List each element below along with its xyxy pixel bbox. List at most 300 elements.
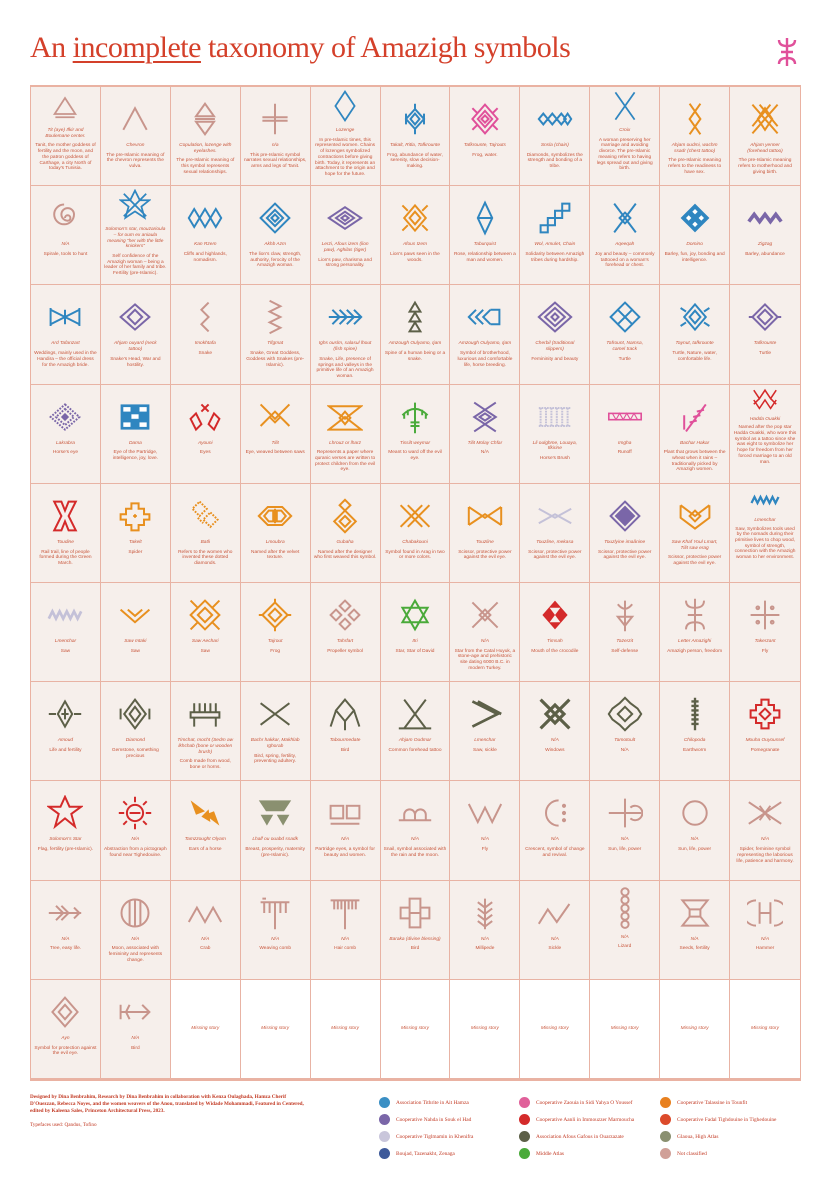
cell: Timsah: Mouth of the crocodile <box>531 649 578 654</box>
cell: Itri <box>381 583 450 682</box>
cell: Copulation <box>171 87 241 186</box>
cell: Chevron: The pre-Islamic meaning of the chevron represents the vulva. <box>106 153 164 169</box>
cell: Imgha <box>590 385 660 484</box>
cell: Lmoubra <box>241 484 311 583</box>
cell: Tifgmat: Tifgmat <box>267 341 283 346</box>
cell: Tree: Tree, easy life. <box>50 946 81 951</box>
cell: Lli oulghme: Lli oulghme, Louaya, <box>533 441 577 446</box>
cell: n/a cross: This pre-Islamic symbol narrates sexual relationships, arms and legs of Tanit. <box>244 153 306 169</box>
cell: Sun circle: Sun, life, power <box>678 847 711 852</box>
cell: Afous Izem <box>381 186 450 285</box>
cell: Lerzi: Lerzi, Afous izem (lion <box>322 242 369 247</box>
cell: Domino <box>660 186 730 285</box>
cell: Lmenchar saw: Lmenchar <box>55 639 76 644</box>
cell: Saw Aechari: Saw Aechari <box>192 639 219 644</box>
cell: Saw mtaki: Saw mtaki <box>124 639 146 644</box>
cell: Ighs ouslm <box>311 285 381 385</box>
cell: Taburquist: Taburquist <box>474 242 496 247</box>
credits text: Designed by Dina Benbrahim, Research by Dina Benbrahim in collaboration with Kenza Oulaghada, Hamza Cherif D'Ouezzan, Rebecca Noyes, and the women weavers of the Anou, translated by Widade Mohammadi, Featured in Centered, edited by Kaleena Sales, Princeton Architectural Press, 2023. <box>30 1094 304 1114</box>
cell: Bird: Bird <box>131 1046 140 1050</box>
cell: Catal Huyuk star <box>450 583 520 682</box>
cell: Sickle: N/A <box>551 937 559 942</box>
cell: missing 9: Missing story <box>751 1026 779 1031</box>
cell: Tilit Molay Chfar: N/A <box>481 450 489 455</box>
cell: Lakrabra: Lakrabra <box>56 441 75 446</box>
cell: Lizard: Lizard <box>618 944 631 949</box>
cell: Bird <box>101 980 171 1079</box>
cell: Timchat: lkhchab (bone or wooden <box>178 744 232 749</box>
cell: Tighedouine sun: N/A <box>131 837 139 842</box>
cell: missing 1: Missing story <box>191 1026 219 1031</box>
cell: Zigzag: Barley, abundance <box>745 252 785 257</box>
cell: Lhalf <box>241 781 311 881</box>
cell: Sun circle <box>660 781 730 881</box>
cell: Dama: Dama <box>129 441 142 446</box>
cell: Weaving comb <box>241 881 311 980</box>
cell: Gubaha <box>311 484 381 583</box>
cell: Sickle <box>520 881 590 980</box>
cell: Saw Aechari <box>171 583 241 682</box>
cell: Tafkrounte turtle: Turtle <box>759 351 771 356</box>
cell: Letter Amazighi <box>660 583 730 682</box>
cell: Solomon's Star red: Solomon's Star <box>49 837 82 842</box>
cell: missing 5: Missing story <box>471 1026 499 1031</box>
cell: Amoud <box>31 682 101 781</box>
legend item: Cooperative Zaouia in Sidi Yahya O Youssef <box>536 1100 632 1106</box>
cell: Bachar Hakar <box>660 385 730 484</box>
cell: Baraka <box>381 881 450 980</box>
legend item: Glaoua, High Atlas <box>677 1134 718 1140</box>
cell: Ahjam yenner: (forehead tattoo) <box>747 149 783 154</box>
cell: Cherbil: Cherbil (traditional <box>535 341 574 346</box>
cell: Takelt: Takelt <box>129 540 142 545</box>
cell: Itri: Star, Star of David <box>396 649 434 654</box>
cell: Hadda Ouakki: Hadda Ouakki <box>750 417 780 422</box>
cell: Spirale <box>31 186 101 285</box>
cell: Lmenchar sickle: Lmenchar <box>474 738 496 743</box>
cell: Lozenge: Lozenge <box>336 128 354 133</box>
cell: Lerzi <box>311 186 381 285</box>
cell: Copulation: Copulation, lozenge with eyelashes. <box>179 143 231 154</box>
cell: Moon <box>101 881 171 980</box>
cell: Tafkrounte turtle: Tafkrounte <box>754 341 776 346</box>
cell: Windows <box>520 682 590 781</box>
cell: Snsla: Snsla (chain) <box>541 143 569 148</box>
cell: Hammer <box>730 881 800 980</box>
cell: Afous Izem: Afous Izem <box>403 242 427 247</box>
cell: Tighedouine sun: Abstraction from a pictograph found near Tighedouine. <box>104 847 167 858</box>
cell: Takalt: Takalt, Ritla, Tafkrounte <box>390 143 440 148</box>
cell: Taburquist: Rose, relationship between a man and women. <box>454 252 516 263</box>
cell: Tit <box>31 87 101 186</box>
cell: Baraka: Bird <box>411 946 419 951</box>
cell: Lizard <box>590 881 660 980</box>
cell: Lmenchar saw <box>31 583 101 682</box>
cell: Tilit <box>241 385 311 484</box>
cell: Moon: Moon, associated with femininity and represents change. <box>109 946 162 963</box>
cell: missing 3: Missing story <box>331 1026 359 1031</box>
cell: Wol: Wol, Amulet, Chain <box>534 242 575 247</box>
cell: Tahrfart <box>311 583 381 682</box>
cell: Tamotoult: N/A <box>621 748 629 753</box>
legend item: Association Afous Gafous in Ouarzazate <box>536 1134 624 1140</box>
cell: missing 5 <box>450 980 520 1079</box>
cell: Ayouni: Eyes <box>200 450 211 455</box>
cell: Copulation: The pre-Islamic meaning of this symbol represents sexual relationships. <box>176 158 234 175</box>
cell: Takerzant: Fly <box>762 649 768 654</box>
cell: Tilit Molay Chfar: Tilit Molay Chfar <box>468 441 502 446</box>
cell: Fly <box>450 781 520 881</box>
cell: Afous Izem: Lion's paws seen in the woods. <box>390 252 440 263</box>
legend item <box>379 1148 455 1159</box>
cell: Windows: Windows <box>545 748 565 753</box>
cell: Lerzi: paw), Aghilas (tiger) <box>324 248 366 253</box>
cell: Domino: Domino <box>686 242 703 247</box>
legend item <box>519 1148 564 1159</box>
cell: Ahjam ouyard <box>101 285 171 385</box>
cell: Saw Khaf: Scissor, protective power against the evil eye. <box>668 555 721 566</box>
cell: Toudine: Toudine <box>57 540 74 545</box>
cell: Touzlyine: Scissor, protective power against the evil eye. <box>598 550 651 560</box>
cell: Taburquist <box>450 186 520 285</box>
legend item <box>379 1131 474 1142</box>
title: An incomplete taxonomy of Amazigh symbols <box>30 31 570 64</box>
cell: Lakrabra <box>31 385 101 484</box>
cell: Cherbil: Femininity and beauty <box>531 357 578 362</box>
cell: missing 4 <box>381 980 450 1079</box>
cell: Lerzi: Lion's paw, charisma and strong personality. <box>318 258 372 268</box>
cell: Akhb Azm <box>241 186 311 285</box>
cell: Amzough arrows: Amzough Oulyamo, Ijam <box>459 341 511 346</box>
cell: Chilopoda: Earthworm <box>683 748 706 753</box>
cell: Ighs ouslm: (fish spine) <box>333 347 357 352</box>
legend item: Cooperative Talassine in Tounfit <box>677 1100 747 1106</box>
cell: missing 4: Missing story <box>401 1026 429 1031</box>
cell: Akhb Azm: The lion's claw, strength, authority, ferocity of the Amazigh woman. <box>249 252 301 268</box>
cell: Millipede <box>450 881 520 980</box>
legend item: Cooperative Aanli in Immouzzer Marmoucha <box>536 1116 634 1122</box>
cell: Touzlyine: Touzlyine imaânine <box>604 540 645 545</box>
cell: Amzough Oulyamo: Amzough Oulyamo, Ijam <box>389 341 441 346</box>
cell: Tajrout: Frog <box>270 649 280 654</box>
cell: Tilit: Tilit <box>271 441 279 446</box>
cell: Fly: N/A <box>481 837 489 842</box>
legend item: Not classified <box>677 1150 707 1156</box>
cell: Takerzant <box>730 583 800 682</box>
cell: Mouha Ouyoussef: Pomegranate <box>751 748 779 753</box>
legend item <box>660 1114 776 1125</box>
cell: Tabourmedate: Tabourmedate <box>330 738 360 743</box>
cell: Lhrouz: Lhrouz or lharz <box>329 441 361 446</box>
cell: Timchat <box>171 682 241 781</box>
cell: Tazerzit: Self-defense <box>611 649 638 654</box>
cell: Touzline: Scissor, protective power against the evil eye. <box>458 550 512 560</box>
cell: Windows: N/A <box>551 738 559 743</box>
cell: Tit: Boulemane center. <box>45 134 86 139</box>
cell: Lozenge <box>311 87 381 186</box>
cell: Crescent: Crescent, symbol of change and revival. <box>525 847 585 858</box>
cell: Timchat: Comb made from wood, bone or horns. <box>180 759 231 770</box>
cell: Hadda Ouakki <box>730 385 800 484</box>
cell: missing 8 <box>660 980 730 1079</box>
cell: Ahjam oudmi: Ahjam oudmi, wachm <box>672 143 718 148</box>
cell: Aqeeqah: Joy and beauty – commonly tattooed on a woman's forehead or chest. <box>595 252 655 268</box>
cell: Croix: Croix <box>619 128 630 133</box>
cell: Lhalf: Breast, prosperity, maternity (pre-Islamic). <box>245 847 305 858</box>
legend item <box>519 1097 632 1108</box>
cell: Crescent <box>520 781 590 881</box>
cell: Croix: A woman preserving her marriage and avoiding divorce. The pre-Islamic meaning refers to having legs spread out and giving birth. <box>597 138 653 171</box>
cell: Tajrout <box>241 583 311 682</box>
cell: Lmoubra: Named after the velvet texture. <box>251 550 299 560</box>
cell: Imgha: Runoff <box>618 450 632 455</box>
cell: Kan Rzem: Kan Rzem <box>194 242 216 247</box>
credits text <box>30 1094 304 1128</box>
cell: Timsah <box>520 583 590 682</box>
cell: Moon: N/A <box>131 937 139 942</box>
cell: Solomon's Star red <box>31 781 101 881</box>
cell: Imokhtafa <box>171 285 241 385</box>
cell: Touzlyine <box>590 484 660 583</box>
cell: Weaving comb: N/A <box>271 937 279 942</box>
cell: Lakrabra: Horse's eye <box>53 450 78 455</box>
legend item: Cooperative Nahda in Souk el Had <box>396 1116 471 1122</box>
cell: Tamotoult: Tamotoult <box>614 738 635 743</box>
cell: Solomon's Star red: Flag, fertility (pre-Islamic). <box>38 847 93 852</box>
legend item <box>379 1097 469 1108</box>
cell: Takelt: Spider <box>128 550 142 554</box>
cell: Catal Huyuk star: Star from the Catal Huyuk, a stone-age and prehistoric site dating 6000 B.C. in modern Turkey. <box>455 649 515 671</box>
cell: missing 7 <box>590 980 660 1079</box>
cell: Seeds: Seeds, fertility <box>680 946 710 951</box>
cell: Toudine: Rail trail, line of people formed during the Green March. <box>39 550 92 566</box>
credits text: Typefaces used: Qandus, Tofino <box>30 1122 97 1128</box>
cell: Lli oulghme: Ifkirine <box>548 446 562 451</box>
cell: Snsla <box>520 87 590 186</box>
cell: missing 9 <box>730 980 800 1079</box>
cell: Lhrouz: Represents a paper where quranic verses are written to protect children from the evil eye. <box>315 450 375 472</box>
cell: Ahjam ouyard: Ahjam ouyard (neck <box>114 341 157 346</box>
cell: Sun power: N/A <box>621 837 629 842</box>
cell: Hair comb: Hair comb <box>334 946 356 951</box>
cell: Chilopoda: Chilopoda <box>684 738 705 743</box>
cell: Tilit Molay Chfar <box>450 385 520 484</box>
legend item <box>660 1097 748 1108</box>
cell: Crab <box>171 881 241 980</box>
cell: n/a cross: n/a <box>272 143 278 148</box>
cell: Diamond <box>101 682 171 781</box>
cell: Partridge eyes <box>311 781 381 881</box>
cell: Takalt: Frog, abundance of water, serenity, slow decision-making. <box>387 153 443 169</box>
cell: Takerzant: Takerzant <box>755 639 775 644</box>
cell: Crab: N/A <box>201 937 209 942</box>
cell: Tilit: Eye, weaved between saws <box>246 450 305 455</box>
cell: Takelt <box>101 484 171 583</box>
cell: Ayouni: Ayouni <box>198 441 213 446</box>
cell: Tighedouine sun <box>101 781 171 881</box>
cell: Lmenchar blue <box>730 484 800 583</box>
cell: Tafkrounte: Tafkrounte, Tajrouts <box>464 143 506 148</box>
cell: Tafrount <box>590 285 660 385</box>
cell: Sun power <box>590 781 660 881</box>
cell: Ighs ouslm: Snake, Life, presence of springs and valleys in the primitive life of an Amazigh woman. <box>317 357 374 379</box>
cell: Chabakouni <box>381 484 450 583</box>
cell: Sun power: Sun, life, power <box>608 847 641 852</box>
legend item <box>660 1131 718 1142</box>
cell: Akhb Azm: Akhb Azm <box>264 242 286 247</box>
cell: Timchat: Timchat, mocht (Sedm aw <box>177 738 233 743</box>
cell: Crab: Crab <box>200 946 210 951</box>
cell: Lizard: N/A <box>621 935 629 940</box>
cell: Saw mtaki <box>101 583 171 682</box>
cell: Tit: Tanit, the mother goddess of fertility and the moon, and the patron goddess of Carthage, a city North of today's Tunisia. <box>35 143 96 171</box>
cell: Croix <box>590 87 660 186</box>
cell: Tissilt weymar <box>381 385 450 484</box>
legend item <box>660 1148 707 1159</box>
cell: Letter Amazighi: Letter Amazighi <box>678 639 711 644</box>
cell: Toudine <box>31 484 101 583</box>
legend item: Association Tithrite in Ait Hamza <box>396 1100 469 1106</box>
cell: Timsah: Timsah <box>547 639 563 644</box>
cell: Itri: Itri <box>412 639 418 644</box>
cell: Hammer: N/A <box>761 937 769 942</box>
cell: Saw Khaf: Tilit saw erag <box>680 546 709 550</box>
cell: Tafkrounte: Frog, water. <box>472 153 498 158</box>
legend item: Cooperative Tiglmamin in Khenifra <box>396 1134 473 1140</box>
cell: Snail <box>381 781 450 881</box>
cell: Tahrfart: Tahrfart <box>337 639 353 644</box>
cell: Seeds: N/A <box>691 937 699 942</box>
cell: Chevron <box>101 87 171 186</box>
cell: Lhalf: Lhalf ou ouabd ssadk <box>252 837 298 842</box>
cell: Gubaha: Named after the designer who first weaved this symbol. <box>314 550 376 560</box>
cell: Zigzag: Zigzag <box>758 242 772 247</box>
cell: Baraka: Baraka (divine blessing) <box>389 937 441 942</box>
cell: Spirale: Spirale, tools to hunt <box>44 252 87 257</box>
cell: Wol: Solidarity between Amazigh tribes during hardship. <box>525 252 584 263</box>
cell: Spider feminine: N/A <box>761 837 769 842</box>
cell: Ahjam ouyard: Snake's Head, War and hostility. <box>110 357 161 368</box>
cell: Amzough Oulyamo <box>381 285 450 385</box>
cell: Ard Tafanzart: Ard Tafanzart <box>51 341 80 346</box>
legend item <box>379 1114 472 1125</box>
cell: Chevron: Chevron <box>126 143 144 148</box>
legend <box>379 1097 776 1159</box>
cell: Tifgmat <box>241 285 311 385</box>
cell: Amzough arrows: Symbol of brotherhood, luxurious and comfortable life, horse breeding. <box>457 351 512 368</box>
cell: Taynut: Taynut, tafkrounte <box>676 341 714 346</box>
cell: Spider feminine: Spider, feminine symbol representing the laborious life, patience and harmony. <box>736 847 794 864</box>
cell: Hammer: Hammer <box>756 946 774 951</box>
cell: Tissilt weymar: Tissilt weymar <box>400 441 430 446</box>
cell: Crescent: N/A <box>551 837 559 842</box>
cell: Spirale: N/A <box>61 242 69 247</box>
cell: Solomon's star <box>101 186 171 285</box>
cell: missing 6 <box>520 980 590 1079</box>
cell: Imokhtafa: Imokhtafa <box>195 341 216 346</box>
legend item: Cooperative Fadal Tighdouine in Tighedouine <box>677 1116 776 1122</box>
legend item: Middle Atlas <box>536 1150 564 1156</box>
icon: yaz symbol <box>778 38 796 66</box>
cell: Ahjam oudmi <box>660 87 730 186</box>
cell: Amoud: Life and fertility <box>49 748 82 753</box>
cell: Catal Huyuk star: N/A <box>481 639 489 644</box>
cell: Tabourmedate: Bird <box>341 748 349 753</box>
cell: Tifgmat: Snake, Great Goddess, Goddess with Snakes (pre-Islamic). <box>246 351 304 368</box>
cell: missing 8: Missing story <box>681 1026 709 1031</box>
cell: Ighs ouslm: Ighs ouslm, salasul lhout <box>319 341 371 346</box>
cell: Lmenchar blue: Lmenchar <box>754 518 776 523</box>
cell: Saw Khaf <box>660 484 730 583</box>
cell: Tamzzought Olyam <box>171 781 241 881</box>
cell: Lmenchar sickle: Saw, sickle <box>473 748 497 753</box>
cell: Gubaha: Gubaha <box>337 540 354 545</box>
legend item <box>519 1131 624 1142</box>
cell: Batli <box>171 484 241 583</box>
cell: Touzline mekasa <box>520 484 590 583</box>
cell: Tamzzought Olyam: Ears of a horse <box>189 847 222 852</box>
cell: Lli oulghme <box>520 385 590 484</box>
cell: Weaving comb: Weaving comb <box>259 946 291 951</box>
cell: Imokhtafa: Snake <box>198 351 212 356</box>
cell: Hadda Ouakki: Named after the pop star Hadda Ouakki, who wore this symbol as a tattoo since she was eight to symbolize her hope for freedom from her forced marriage to an old man. <box>734 425 796 465</box>
cell: Dama <box>101 385 171 484</box>
cell: Saw Khaf: Saw Khaf Youl Lmart, <box>672 540 718 545</box>
cell: Tissilt weymar: Meant to ward off the evil eye. <box>388 450 442 461</box>
cell: Touzline: Touzline <box>476 540 494 545</box>
cell: Lmenchar blue: Saw, Symbolizes tools used by the nomads during their primitive lives to chop wood, symbol of strength, connection with the Amazigh woman to her environment. <box>735 526 795 560</box>
cell: Tafrount: camel track <box>612 347 637 352</box>
cell: Mouha Ouyoussef <box>730 682 800 781</box>
cell: Bird: N/A <box>131 1036 139 1041</box>
cell: Ahjam Oudmar: Common forehead tattoo <box>388 748 442 753</box>
cell: Zigzag <box>730 186 800 285</box>
cell: missing 6: Missing story <box>541 1026 569 1031</box>
cell: Snail: N/A <box>411 837 419 842</box>
cell: Wol <box>520 186 590 285</box>
cell: Chilopoda <box>660 682 730 781</box>
cell: Lhrouz <box>311 385 381 484</box>
cell: Tafkrounte <box>450 87 520 186</box>
cell: Tamzzought Olyam: Tamzzought Olyam <box>185 837 226 842</box>
cell: Hair comb <box>311 881 381 980</box>
cell: Chabakouni: Chabakouni <box>402 540 428 545</box>
cell: n/a cross <box>241 87 311 186</box>
cell: Tafrount: Tafrount, Namsa, <box>606 341 643 346</box>
cell: Lli oulghme: Horse's Brush <box>540 456 570 461</box>
legend item <box>519 1114 634 1125</box>
cell: Spider feminine <box>730 781 800 881</box>
cell: Snsla: Diamonds, symbolizes the strength and bonding of a tribe. <box>527 153 583 169</box>
cell: Bachr hakkar: Bird, spring, fertility, preventing adultery. <box>254 754 296 764</box>
cell: Ahjam yenner: The pre-Islamic meaning refers to motherhood and giving birth. <box>738 158 792 175</box>
cell: Batli: Refers to the women who invented these dotted diamonds. <box>178 550 232 566</box>
cell: Aqeeqah: Aqeeqah <box>615 242 634 247</box>
cell: Sickle: Sickle <box>548 946 561 951</box>
cell: Ahjam yenner <box>730 87 800 186</box>
cell: Amzough Oulyamo: Spine of a human being or a snake. <box>385 351 445 362</box>
cell: Touzline mekasa: Touzline, mekasa <box>536 540 573 545</box>
cell: missing 2 <box>241 980 311 1079</box>
cell: Bachar Hakar: Plant that grows between the wheat when it rains – traditionally picked by Amazigh women. <box>664 450 726 472</box>
cell: Dama: Eye of the Partridge, intelligence, joy, love. <box>113 450 158 461</box>
cell: Ayn: Ayn <box>61 1036 70 1041</box>
cell: Kan Rzem <box>171 186 241 285</box>
legend item: Boujad, Tazenakht, Zenaga <box>396 1150 455 1156</box>
cell: Tajrout: Tajrout <box>268 639 282 644</box>
cell: Tree <box>31 881 101 980</box>
cell: Hair comb: N/A <box>341 937 349 942</box>
